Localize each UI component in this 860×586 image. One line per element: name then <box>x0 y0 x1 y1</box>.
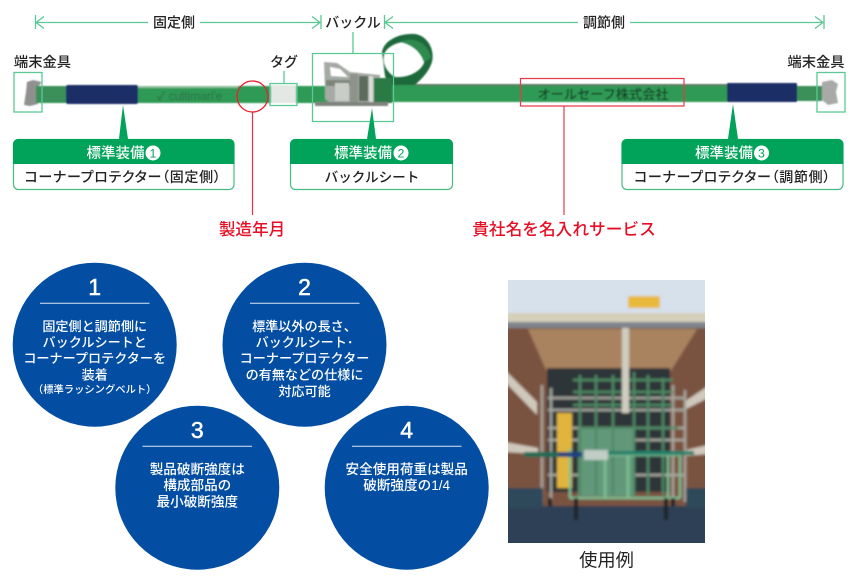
company name service label: 貴社名を名入れサービス <box>472 220 656 239</box>
feature circle 3: 製品破断強度は <box>150 462 245 477</box>
company name frame <box>520 78 684 215</box>
left end fitting label: 端末金具 <box>14 54 71 71</box>
wall rails <box>505 370 708 456</box>
callout: standard equipment 1: コーナープロテクター（固定側） <box>25 169 221 185</box>
feature circle 3: 3 <box>191 417 204 443</box>
feature circle 4: 4 <box>400 417 413 443</box>
feature circle 1: コーナープロテクターを <box>23 351 166 366</box>
lashing belt <box>524 452 558 457</box>
feature circle 2: の有無などの仕様に <box>246 368 363 382</box>
right end fitting label: 端末金具 <box>787 54 845 71</box>
buckle loop <box>382 34 433 90</box>
feature circle 4: 破断強度の1/4 <box>363 478 451 493</box>
cargo interior <box>505 328 708 508</box>
right strap <box>380 85 727 102</box>
feature circle 1: （標準ラッシングベルト） <box>33 383 156 396</box>
yellow cargo <box>557 413 572 488</box>
right protector <box>727 83 797 102</box>
manufacture date marker <box>252 112 254 215</box>
buckle frame <box>312 32 394 122</box>
callout: standard equipment 2: バックルシート <box>325 170 419 185</box>
usage photo <box>505 277 708 546</box>
truck header <box>505 277 708 313</box>
callout: standard equipment 2: 2 <box>398 146 405 160</box>
adjusting side dimension arrow <box>384 15 824 29</box>
feature circle 4 <box>325 406 489 570</box>
left strap <box>36 86 336 103</box>
feature circle 3: 構成部品の <box>163 478 231 493</box>
roll cages <box>542 385 686 502</box>
callout: standard equipment 3: 標準装備 <box>695 145 753 162</box>
floor <box>505 506 708 546</box>
left protector <box>66 85 138 104</box>
feature circle 3: 最小破断強度 <box>157 494 238 510</box>
callout: standard equipment 1 <box>13 105 234 190</box>
adjusting side label: 調節側 <box>583 14 625 30</box>
feature circle 1: 1 <box>88 274 101 300</box>
buckle label: バックル <box>325 14 381 30</box>
left end fitting frame <box>14 72 42 112</box>
tag frame <box>270 71 297 106</box>
feature circle 1 <box>13 263 177 427</box>
fixed side dimension arrow <box>36 15 321 29</box>
printed logo on strap: ✓ cultimarl'e <box>157 89 223 103</box>
callout: standard equipment 2 <box>290 108 453 190</box>
callout: standard equipment 1: 標準装備 <box>86 145 144 162</box>
callout: standard equipment 1: 1 <box>150 146 157 160</box>
front cage <box>570 448 680 498</box>
feature circle 2: バックルシート･ <box>256 335 353 350</box>
fixed side label: 固定側 <box>153 14 195 30</box>
feature circle 3 <box>115 406 279 570</box>
left metal end fitting <box>24 80 42 106</box>
feature circle 2: 対応可能 <box>278 384 331 399</box>
callout: standard equipment 3: 3 <box>758 146 765 160</box>
feature circle 1: 装着 <box>82 368 108 382</box>
callout: standard equipment 3: コーナープロテクター（調節側） <box>634 169 831 185</box>
feature circle 2: 標準以外の長さ、 <box>252 318 357 334</box>
feature circle 1: バックルシートと <box>43 335 147 350</box>
right metal end fitting <box>822 80 838 105</box>
green cargo <box>578 428 634 496</box>
tag label: タグ <box>270 54 298 70</box>
belt photo illustration <box>24 34 838 106</box>
feature circle 2: コーナープロテクター <box>240 351 369 366</box>
manufacture date circle <box>237 81 268 112</box>
tag <box>271 85 296 103</box>
manufacture date label: 製造年月 <box>219 220 285 239</box>
vertical pole <box>622 328 629 413</box>
buckle <box>324 62 380 103</box>
right end fitting frame <box>817 72 845 112</box>
feature circle 2 <box>222 263 386 427</box>
feature circle 2: 2 <box>298 274 311 300</box>
callout: standard equipment 2: 標準装備 <box>334 145 392 162</box>
feature circle 1: 固定側と調節側に <box>42 318 147 334</box>
callout: standard equipment 3 <box>622 104 844 190</box>
company name printed on strap: オールセーフ株式会社 <box>537 87 669 102</box>
usage photo caption: 使用例 <box>579 550 634 570</box>
feature circle 4: 安全使用荷重は製品 <box>346 462 468 477</box>
